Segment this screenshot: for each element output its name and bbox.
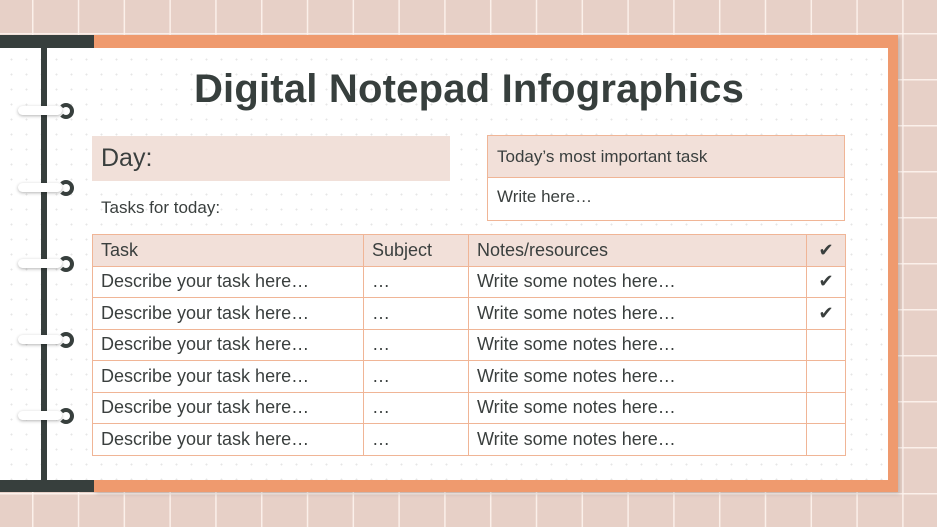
important body: Write here… <box>497 187 592 206</box>
dark bar bottom <box>0 480 94 492</box>
ring 2 <box>16 180 74 196</box>
task table: … <box>372 303 390 323</box>
day box <box>92 136 450 181</box>
title: Digital Notepad Infographics <box>194 67 744 111</box>
task table: … <box>372 334 390 354</box>
task table: Write some notes here… <box>477 366 676 386</box>
task table: ✔ <box>818 271 834 291</box>
task table: Task <box>101 240 138 260</box>
orange frame <box>94 35 898 492</box>
task table: Describe your task here… <box>101 334 309 354</box>
task table: Write some notes here… <box>477 303 676 323</box>
task table: … <box>372 366 390 386</box>
important heading: Today’s most important task <box>497 147 707 166</box>
ring 3 <box>16 256 74 272</box>
ring 5 <box>16 408 74 424</box>
rings <box>16 103 74 424</box>
task table: Write some notes here… <box>477 397 676 417</box>
task table <box>92 234 846 456</box>
paper <box>0 48 888 480</box>
task table: Write some notes here… <box>477 334 676 354</box>
day box: Day: <box>101 144 152 172</box>
task table: Write some notes here… <box>477 429 676 449</box>
task table: ✔ <box>818 303 834 323</box>
task table: Describe your task here… <box>101 271 309 291</box>
task table: Describe your task here… <box>101 429 309 449</box>
important heading <box>488 136 844 178</box>
task table: ✔ <box>818 240 834 260</box>
task table: Describe your task here… <box>101 366 309 386</box>
spine <box>41 48 47 480</box>
task table: Subject <box>372 240 432 260</box>
task table: Describe your task here… <box>101 303 309 323</box>
task table: … <box>372 397 390 417</box>
task table: … <box>372 271 390 291</box>
important task box <box>487 135 845 221</box>
task table: … <box>372 429 390 449</box>
ring 4 <box>16 332 74 348</box>
ring 1 <box>16 103 74 119</box>
dark bar top <box>0 35 94 48</box>
task table: Describe your task here… <box>101 397 309 417</box>
task table: Notes/resources <box>477 240 608 260</box>
task table: Write some notes here… <box>477 271 676 291</box>
tasks label: Tasks for today: <box>101 198 220 217</box>
